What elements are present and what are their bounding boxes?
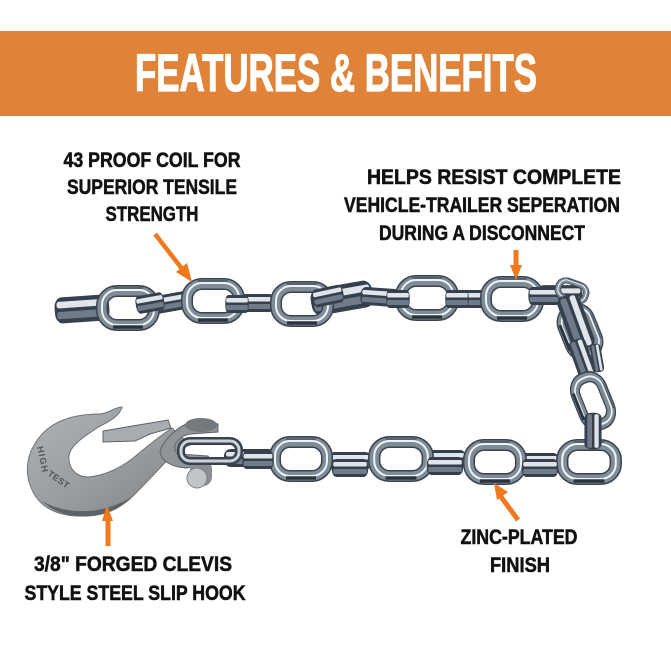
arrow: slip hook: [102, 505, 113, 546]
callout: zinc plated: [460, 525, 578, 577]
hook stamp: high: HIGH: [35, 445, 50, 473]
arrow: proof coil: [155, 234, 192, 282]
chain: bottom run: [224, 413, 616, 481]
clevis pin top: [185, 418, 217, 432]
callout: proof coil: SUPERIOR TENSILE: [67, 175, 237, 199]
callout: slip hook: STYLE STEEL SLIP HOOK: [24, 581, 246, 605]
latch: [103, 420, 171, 442]
callout: slip hook: [24, 552, 246, 605]
clevis pin bottom: [187, 460, 212, 488]
header banner: [0, 31, 671, 116]
hook underside shadow: [42, 497, 132, 516]
slip hook: [27, 407, 239, 516]
callout: proof coil: [64, 148, 241, 226]
callout: zinc plated: FINISH: [490, 553, 550, 577]
callout: separation: [344, 165, 621, 245]
hook body: [27, 407, 190, 516]
callout: slip hook: 3/8" FORGED CLEVIS: [34, 552, 232, 576]
hook stamp: test: TEST: [46, 468, 72, 491]
callout: proof coil: 43 PROOF COIL FOR: [64, 148, 241, 172]
callout: separation: DURING A DISCONNECT: [379, 221, 585, 245]
chain: top run: [54, 278, 582, 327]
callout: zinc plated: ZINC-PLATED: [460, 525, 578, 549]
chain: right side run: [555, 277, 617, 430]
callout: proof coil: STRENGTH: [106, 202, 198, 226]
clevis: [160, 421, 218, 468]
first chain link in clevis: [181, 441, 239, 461]
callout: separation: HELPS RESIST COMPLETE: [367, 165, 621, 189]
arrow: zinc finish: [494, 483, 518, 520]
arrow: separation: [510, 250, 522, 280]
